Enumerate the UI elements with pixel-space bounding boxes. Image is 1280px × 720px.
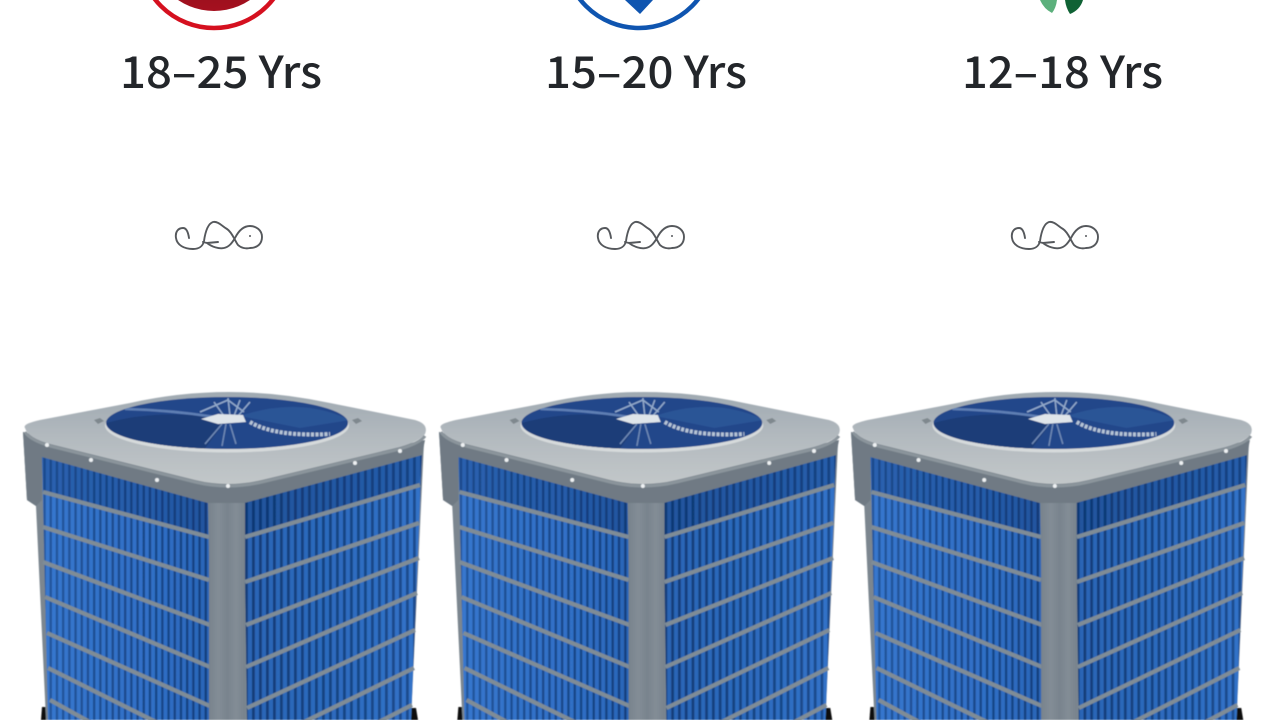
lifespan label: 18–25 Yrs: 18–25 Yrs <box>120 37 322 101</box>
flourish ornament right <box>1012 222 1098 249</box>
icon: green leaves <box>1040 0 1083 14</box>
air conditioner unit center <box>439 392 840 720</box>
flourish ornament left <box>176 222 262 249</box>
lifespan label: 12–18 Yrs: 12–18 Yrs <box>962 37 1163 101</box>
lifespan label: 15–20 Yrs: 15–20 Yrs <box>545 37 747 101</box>
icon: red emblem <box>139 0 289 28</box>
icon: blue emblem <box>564 0 714 28</box>
air conditioner unit right <box>851 392 1252 720</box>
flourish ornament center <box>598 222 684 249</box>
air conditioner unit left <box>23 392 426 720</box>
